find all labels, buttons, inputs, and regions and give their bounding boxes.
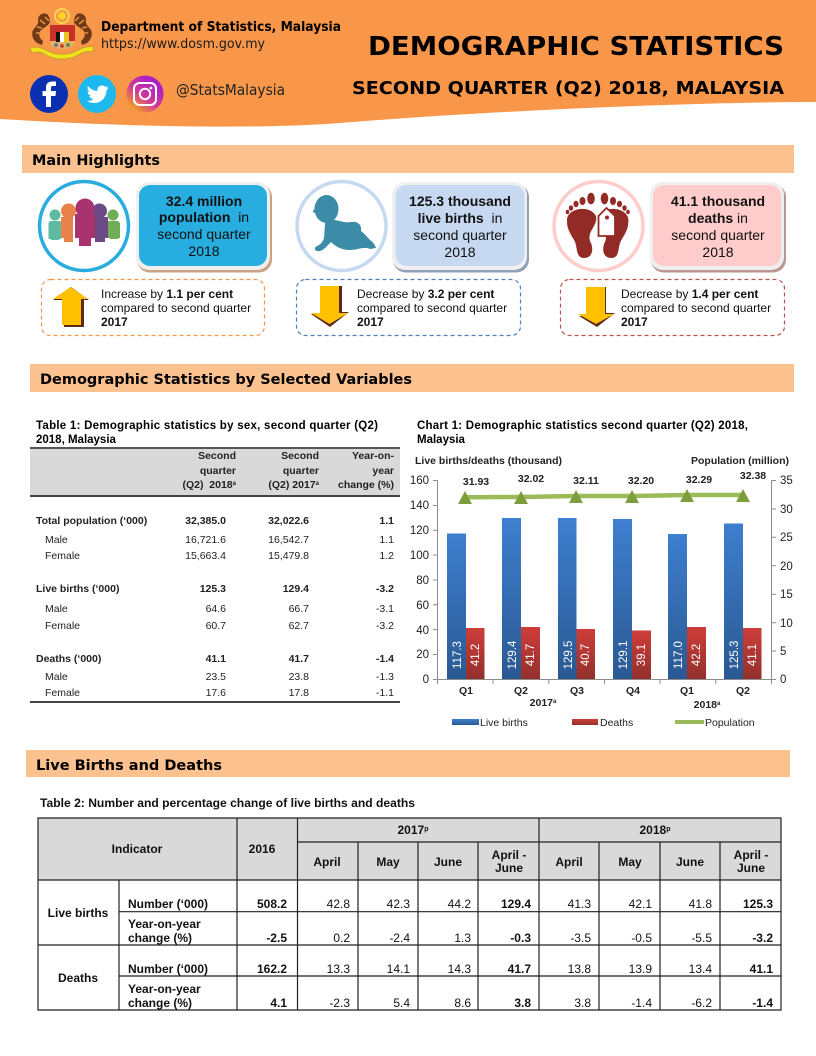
table 1 rows: total population: Male (45, 534, 68, 546)
callout: 125.3 thousand live births: 125.3 thousand (409, 193, 511, 209)
icon: up arrow (53, 287, 89, 327)
table 2 group: deaths: 14.3 (448, 962, 471, 976)
table 2 header: April (313, 855, 341, 869)
table 1 rows: live births: 64.6 (206, 603, 226, 615)
chart title (417, 420, 748, 446)
icon: twitter (78, 75, 116, 113)
left axis labels: 120 (410, 525, 429, 537)
table 1 rows: live births: Female (45, 620, 80, 632)
callout: 125.3 thousand live births: live births in (418, 210, 502, 226)
icon: down arrow (311, 286, 349, 327)
category labels: 2018 (694, 699, 717, 711)
left axis labels: 160 (410, 475, 429, 487)
bar value labels: 129.5 (563, 641, 575, 669)
category labels (459, 685, 750, 711)
table 2 group: deaths: 162.2 (257, 962, 287, 976)
table 1 header: Year-on- (352, 450, 394, 462)
table 2 group: live births: 41.3 (568, 897, 591, 911)
right axis labels: 0 (780, 674, 786, 686)
callout: 41.1 thousand deaths: deaths in (688, 210, 748, 226)
bar value labels: 125.3 (729, 641, 741, 669)
bar value labels: 117.0 (673, 641, 685, 669)
legend: Live births (480, 717, 528, 729)
table 2 header: June (737, 861, 765, 875)
table 2 group: live births: 0.2 (333, 931, 350, 945)
callout: live births change (296, 280, 520, 336)
table 2 group: live births: -3.5 (570, 931, 591, 945)
table 2 group: deaths: 13.9 (629, 962, 652, 976)
table 2 group: live births: Live births (48, 906, 109, 920)
table 1 rows: deaths: 23.5 (206, 671, 226, 683)
table 2 group: deaths: 5.4 (393, 996, 410, 1010)
legend: Deaths (600, 717, 633, 729)
table 2 group: live births: 44.2 (448, 897, 471, 911)
section heading: Main Highlights: Main Highlights (32, 153, 160, 169)
callout: deaths change (560, 280, 784, 336)
legend (452, 717, 755, 729)
table 1 header: Second (281, 450, 319, 462)
table 2 group: deaths (58, 962, 773, 1010)
subtitle: SECOND QUARTER (Q2) 2018, MALAYSIA (352, 78, 784, 99)
header banner (0, 0, 816, 127)
table 2 group: deaths: Year-on-year (128, 982, 201, 996)
left axis labels: 140 (410, 500, 429, 512)
table 1 rows: live births: -3.2 (376, 583, 394, 595)
table 1 rows: total population: Female (45, 550, 80, 562)
right axis labels: 15 (780, 589, 793, 601)
section heading: Main Highlights (22, 145, 794, 173)
callout: 41.1 thousand deaths: 2018 (702, 244, 734, 260)
table 2 group: live births: 125.3 (743, 897, 773, 911)
table 1 rows: deaths: -1.1 (376, 687, 394, 699)
callout: population change: Increase by 1.1 per cent (101, 287, 233, 301)
bar value labels: 41.2 (470, 644, 482, 666)
table 2 group: deaths: 8.6 (454, 996, 471, 1010)
panel: population highlight (40, 182, 272, 336)
table 1 rows: live births: -3.1 (376, 603, 394, 615)
callout: 125.3 thousand live births: second quarter (413, 227, 507, 243)
table 2: live births and deaths (38, 818, 781, 1010)
right axis labels: 20 (780, 561, 793, 573)
callout: 32.4 million population: 32.4 million (166, 193, 242, 209)
right axis labels: 25 (780, 532, 793, 544)
bar value labels (452, 640, 759, 669)
table 2 group: deaths: -1.4 (631, 996, 652, 1010)
callout: population change: compared to second quarter (101, 301, 251, 315)
table 1 title: 2018, Malaysia (36, 434, 117, 446)
table 2 header: June (676, 855, 704, 869)
table 1 rows: live births: Male (45, 603, 68, 615)
table 1 rows: live births: 125.3 (200, 583, 226, 595)
table 2 group: live births: 42.8 (327, 897, 350, 911)
bar value labels: 40.7 (580, 644, 592, 666)
bar value labels: 129.4 (507, 640, 519, 669)
table 1 title: Table 1: Demographic statistics by sex, second quarter (Q2) (36, 420, 378, 432)
table 2 group: deaths: -6.2 (691, 996, 712, 1010)
table 1 rows: live births (36, 583, 394, 632)
table 1 rows: total population: 15,663.4 (185, 550, 226, 562)
axis titles: Population (million) (691, 455, 789, 467)
table 2 group: deaths: 41.7 (508, 962, 531, 976)
table 2 group: deaths: Number (‘000) (128, 962, 208, 976)
callout: 125.3 thousand live births (392, 182, 529, 272)
legend: Population (705, 717, 755, 729)
table 1 rows: live births: 62.7 (289, 620, 309, 632)
table 2 group: deaths: 13.3 (327, 962, 350, 976)
section heading: Live Births and Deaths: Live Births and Deaths (36, 758, 222, 774)
chart 1: demographic statistics (410, 420, 793, 729)
social handle: @StatsMalaysia (176, 81, 285, 99)
table 1 rows: total population: 1.1 (379, 515, 394, 527)
table 1 rows: total population: 16,721.6 (185, 534, 226, 546)
table 2 group: deaths: 13.4 (689, 962, 712, 976)
callout: population change: 2017 (101, 315, 128, 329)
table 2 header: May (376, 855, 400, 869)
left axis labels: 100 (410, 550, 429, 562)
table 1 rows: total population: 16,542.7 (268, 534, 309, 546)
table 2 group: deaths: -2.3 (329, 996, 350, 1010)
section heading: Demographic Statistics by Selected Variables (30, 364, 794, 392)
table 2 group: deaths: 41.1 (750, 962, 773, 976)
population value labels: 32.29 (686, 474, 712, 486)
table 1 rows: deaths: 23.8 (289, 671, 309, 683)
right axis labels: 35 (780, 475, 793, 487)
table 1 rows: deaths: 41.7 (289, 653, 309, 665)
left axis labels: 60 (416, 600, 429, 612)
bar value labels: 117.3 (452, 641, 464, 669)
table 1 header (30, 447, 400, 497)
right axis labels (780, 475, 793, 686)
icon: feet with tag (554, 182, 643, 270)
table 2 group: live births: 41.8 (689, 897, 712, 911)
callout: live births change: 2017 (357, 315, 384, 329)
axes and ticks (433, 480, 776, 684)
callout: 32.4 million population: 2018 (188, 243, 220, 259)
table 2 header: May (618, 855, 642, 869)
icon: down arrow (578, 287, 615, 327)
table 2 group: live births: Year-on-year (128, 917, 201, 931)
table 1 rows: deaths: 41.1 (206, 653, 226, 665)
table 1 title (36, 420, 378, 446)
population value labels (463, 470, 766, 488)
table 2 group: live births: 42.3 (387, 897, 410, 911)
table 2 group: live births: -2.5 (266, 931, 287, 945)
axis titles (415, 455, 789, 467)
table 1 rows: deaths: Male (45, 671, 68, 683)
bar value labels: 41.1 (747, 644, 759, 666)
population value labels: 32.11 (573, 475, 599, 487)
table 1 rows: live births: -3.2 (376, 620, 394, 632)
callout: deaths change: Decrease by 1.4 per cent (621, 287, 758, 301)
right axis labels: 10 (780, 618, 793, 630)
category labels: Q1 (459, 685, 473, 697)
table 2 group: deaths: 3.8 (574, 996, 591, 1010)
callout: population change (42, 280, 264, 336)
bar value labels: 41.7 (525, 644, 537, 666)
table 2 group: deaths: Deaths (58, 971, 98, 985)
section heading: Demographic Statistics by Selected Variables: Demographic Statistics by Selected Variables (40, 372, 412, 388)
table 2 header: April - (734, 848, 768, 862)
table 1 rows: live births: 60.7 (206, 620, 226, 632)
callout: deaths change: 2017 (621, 315, 648, 329)
callout: live births change: compared to second quarter (357, 301, 507, 315)
table 2 group: live births: -0.5 (631, 931, 652, 945)
table 2 group: live births: 42.1 (629, 897, 652, 911)
category labels: Q3 (570, 685, 584, 697)
left axis labels: 80 (416, 575, 429, 587)
table 1 rows: total population: 32,022.6 (268, 515, 309, 527)
table 1 rows: deaths: -1.4 (376, 653, 394, 665)
population value labels: 32.02 (518, 473, 544, 485)
callout: 32.4 million population: second quarter (157, 226, 251, 242)
callout: deaths change: compared to second quarter (621, 301, 771, 315)
table 2 header: June (434, 855, 462, 869)
table 1 rows: total population: 1.1 (379, 534, 394, 546)
department name: Department of Statistics, Malaysia (101, 19, 341, 35)
bar value labels: 129.1 (618, 641, 630, 669)
population value labels: 31.93 (463, 476, 489, 488)
icon: facebook (30, 75, 68, 113)
icon: Malaysia coat of arms (30, 9, 94, 59)
bar value labels: 39.1 (636, 644, 648, 666)
icon: people (40, 182, 128, 270)
table 2 group: deaths: 13.8 (568, 962, 591, 976)
table 1 rows: deaths (36, 653, 394, 699)
title: DEMOGRAPHIC STATISTICS (368, 32, 784, 62)
bars: live births (447, 518, 743, 679)
table 1 rows: deaths: 17.8 (289, 687, 309, 699)
callout: 41.1 thousand deaths: 41.1 thousand (671, 193, 765, 209)
left axis labels (410, 475, 429, 686)
table 1 header: (Q2) 2017 (268, 479, 316, 491)
icon: crawling baby (297, 182, 386, 270)
table 1 rows: total population: 15,479.8 (268, 550, 309, 562)
chart title: Malaysia (417, 434, 466, 446)
category labels: Q1 (680, 685, 694, 697)
table 1 rows: total population: Total population (‘000) (36, 515, 147, 527)
table 2 title: Table 2: Number and percentage change of live births and deaths (40, 798, 415, 810)
callout: 41.1 thousand deaths (650, 182, 786, 272)
table 1 rows: total population: 32,385.0 (185, 515, 226, 527)
table 2 header (112, 823, 768, 875)
table 2 group: live births: -2.4 (389, 931, 410, 945)
category labels: a (553, 699, 557, 705)
category labels: a (717, 701, 721, 707)
table 1 rows: live births: 129.4 (283, 583, 309, 595)
bars: deaths (466, 627, 762, 679)
table 2 group: live births: -3.2 (752, 931, 773, 945)
table 2 header: 2016 (249, 842, 276, 856)
chart title: Chart 1: Demographic statistics second quarter (Q2) 2018, (417, 420, 748, 432)
table 2 header: 2017 (398, 823, 424, 837)
table 2 group: live births: Number (‘000) (128, 897, 208, 911)
table 2 group: live births (48, 897, 773, 945)
axis titles: Live births/deaths (thousand) (415, 455, 562, 467)
table 1 rows: total population: 1.2 (379, 550, 394, 562)
table 1 rows: deaths: Female (45, 687, 80, 699)
table 2 group: live births: 1.3 (454, 931, 471, 945)
table 2 group: deaths: 14.1 (387, 962, 410, 976)
table 2 header: p (666, 826, 670, 833)
population value labels: 32.20 (628, 475, 654, 487)
table 2 group: live births: -5.5 (691, 931, 712, 945)
table 1 rows: live births: 66.7 (289, 603, 309, 615)
section heading: Live Births and Deaths (26, 750, 790, 777)
callout: 125.3 thousand live births: 2018 (444, 244, 476, 260)
table 1: demographic statistics by sex (30, 420, 400, 703)
table 2 group: deaths: 3.8 (514, 996, 531, 1010)
table 2 group: live births: 508.2 (257, 897, 287, 911)
table 2 header: 2018 (640, 823, 666, 837)
population value labels: 32.38 (740, 470, 766, 482)
website: https://www.dosm.gov.my (101, 37, 265, 52)
table 2 header: April (555, 855, 583, 869)
bar value labels: 42.2 (691, 644, 703, 666)
table 2 group: live births: change (%) (128, 931, 192, 945)
table 2 group: live births: 129.4 (501, 897, 531, 911)
table 1 rows: total population (36, 515, 394, 562)
left axis labels: 20 (416, 649, 429, 661)
table 1 header: quarter (283, 465, 319, 477)
callout: 32.4 million population (136, 182, 272, 272)
table 1 header: quarter (200, 465, 236, 477)
table 1 rows: deaths: Deaths (‘000) (36, 653, 101, 665)
table 2 group: deaths: change (%) (128, 996, 192, 1010)
table 2 header: Indicator (112, 842, 163, 856)
table 2 group: live births: -0.3 (510, 931, 531, 945)
panel: live births highlight (296, 182, 529, 336)
table 1 header: a (233, 481, 237, 487)
category labels: Q4 (626, 685, 640, 697)
right axis labels: 30 (780, 504, 793, 516)
left axis labels: 0 (423, 674, 429, 686)
table 1 header: Second (198, 450, 236, 462)
panel: deaths highlight (554, 182, 786, 336)
table 2 header: p (424, 826, 428, 833)
callout: 32.4 million population: population in (159, 209, 249, 225)
table 2 group: deaths: -1.4 (752, 996, 773, 1010)
category labels: Q2 (514, 685, 528, 697)
callout: 41.1 thousand deaths: second quarter (671, 227, 765, 243)
table 2 header: June (495, 861, 523, 875)
table 2 header: April - (492, 848, 526, 862)
table 1 header: (Q2) 2018 (182, 479, 233, 491)
icon: instagram (126, 76, 164, 112)
right axis labels: 5 (780, 646, 786, 658)
population line (458, 489, 750, 504)
table 1 rows: live births: Live births (‘000) (36, 583, 119, 595)
table 1 rows: deaths: 17.6 (206, 687, 226, 699)
table 1 header: year (372, 465, 394, 477)
table 1 header: a (316, 481, 320, 487)
category labels: 2017 (530, 697, 553, 709)
table 2 group: deaths: 4.1 (270, 996, 287, 1010)
category labels: Q2 (736, 685, 750, 697)
table 1 rows: deaths: -1.3 (376, 671, 394, 683)
callout: live births change: Decrease by 3.2 per cent (357, 287, 494, 301)
left axis labels: 40 (416, 625, 429, 637)
table 1 header: change (%) (338, 479, 394, 491)
